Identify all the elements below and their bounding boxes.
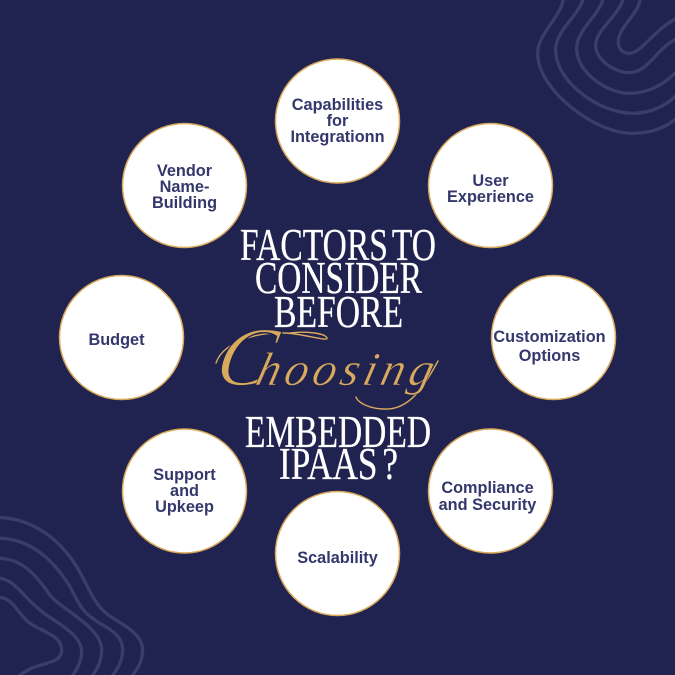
circle: Support and Upkeep xyxy=(122,429,246,553)
title: lower lines: IPAAS ? xyxy=(279,439,398,489)
circle: Budget: Budget xyxy=(88,331,145,349)
circle: Budget xyxy=(60,276,184,400)
circle: User Experience: User xyxy=(472,172,509,190)
circle: Scalability: Scalability xyxy=(297,549,378,567)
circle: Vendor Name-Building: Building xyxy=(152,194,217,212)
circle: Capabilities for Integrationn: Integrationn xyxy=(290,128,385,146)
circle: Vendor Name-Building xyxy=(122,124,246,248)
decoration: contour lines top right xyxy=(538,0,675,133)
circle: Compliance and Security xyxy=(428,429,552,553)
circle: User Experience: Experience xyxy=(447,188,534,206)
circle: Customization Options: Customization xyxy=(493,328,606,346)
title: upper lines: FACTORS TO xyxy=(240,220,436,270)
circle: Compliance and Security: Compliance xyxy=(441,479,534,497)
circle: Capabilities for Integrationn xyxy=(276,59,400,183)
circle: Customization Options xyxy=(492,276,616,400)
decoration: contour lines bottom left xyxy=(0,517,143,675)
title: lower lines xyxy=(245,407,431,489)
circle: Support and Upkeep: Upkeep xyxy=(155,498,214,516)
title: script word Choosing: Choosing xyxy=(207,311,453,404)
circle: Capabilities for Integrationn: for xyxy=(327,112,349,130)
circle: Scalability xyxy=(276,492,400,616)
title: upper lines: BEFORE xyxy=(274,287,403,337)
circle: Vendor Name-Building: Name- xyxy=(160,178,209,196)
circle: Compliance and Security: and Security xyxy=(439,496,536,514)
circle: Capabilities for Integrationn: Capabilities xyxy=(292,96,383,114)
title: upper lines xyxy=(240,220,436,337)
circle: Vendor Name-Building: Vendor xyxy=(157,162,213,180)
circle: User Experience xyxy=(428,124,552,248)
circle: Customization Options: Options xyxy=(519,347,580,365)
circle: Support and Upkeep: and xyxy=(170,482,199,500)
circle: Support and Upkeep: Support xyxy=(153,466,216,484)
title: upper lines: CONSIDER xyxy=(255,253,422,303)
title: lower lines: EMBEDDED xyxy=(245,407,431,457)
